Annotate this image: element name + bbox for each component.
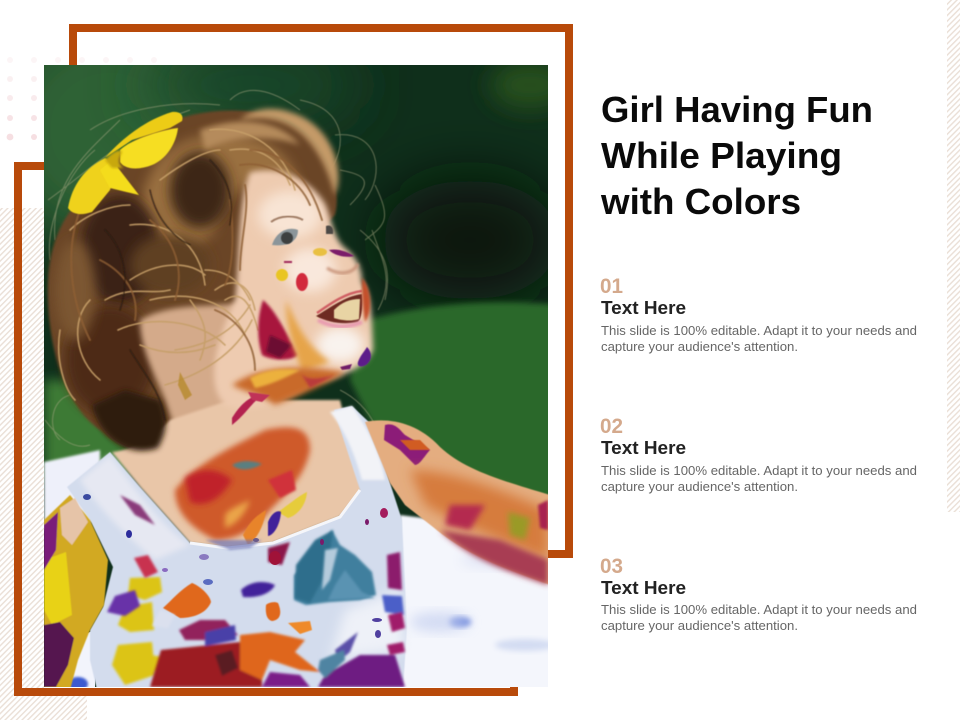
- dress: white painted top: [67, 406, 407, 690]
- item 03: [600, 555, 917, 633]
- background hatch: left: [0, 208, 87, 720]
- item 02: [600, 415, 917, 494]
- item 01: capture your audience's attention.: [601, 340, 798, 354]
- item 02: 02: [600, 415, 623, 438]
- fly-away hair: [45, 90, 388, 446]
- right arm: [365, 420, 550, 585]
- background hatch: right: [947, 0, 960, 512]
- dress paint: orange splashes: [163, 583, 312, 634]
- photo background: white cloth: [44, 450, 560, 700]
- ribbon bow: yellow: [68, 112, 183, 214]
- face: [214, 170, 373, 408]
- dress paint: left yellow patches: [112, 577, 170, 685]
- item 03: capture your audience's attention.: [601, 619, 798, 633]
- decorative dot grid: [7, 57, 157, 140]
- title: with Colors: [600, 181, 801, 222]
- face paint: [178, 248, 371, 425]
- title: [600, 89, 873, 222]
- photo background: grass: [44, 302, 560, 520]
- smile: [316, 291, 362, 326]
- item 01: 01: [600, 275, 623, 298]
- front frame: bottom left: [14, 162, 518, 696]
- item 01: Text Here: [601, 298, 686, 318]
- item 01: [600, 275, 917, 354]
- eye: [271, 216, 333, 245]
- item 03: 03: [600, 555, 623, 578]
- title: Girl Having Fun: [601, 89, 873, 130]
- photo background: dark green foliage: [44, 65, 548, 687]
- neck and chest skin: [112, 400, 362, 548]
- dress paint: blue teal patch: [294, 530, 376, 605]
- item 02: This slide is 100% editable. Adapt it to your needs and: [601, 464, 917, 478]
- item 03: Text Here: [601, 578, 686, 598]
- item 02: capture your audience's attention.: [601, 480, 798, 494]
- back frame: top right: [69, 24, 573, 558]
- item 01: This slide is 100% editable. Adapt it to your needs and: [601, 324, 917, 338]
- item 02: Text Here: [601, 438, 686, 458]
- photo: girl with paint: [44, 65, 548, 687]
- hair mass: [48, 109, 339, 452]
- chest paint: [175, 427, 310, 545]
- item 03: This slide is 100% editable. Adapt it to your needs and: [601, 603, 917, 617]
- dress paint: reds and purples: [107, 495, 405, 687]
- left arm: [44, 495, 108, 690]
- dress paint: small speckles: [83, 494, 388, 638]
- hair strands over head: [59, 129, 322, 420]
- ear and cheek skin under the hair: [136, 300, 236, 421]
- title: While Playing: [601, 135, 842, 176]
- dark hair lock at the nape: [92, 390, 166, 451]
- nose shadow: [327, 264, 358, 273]
